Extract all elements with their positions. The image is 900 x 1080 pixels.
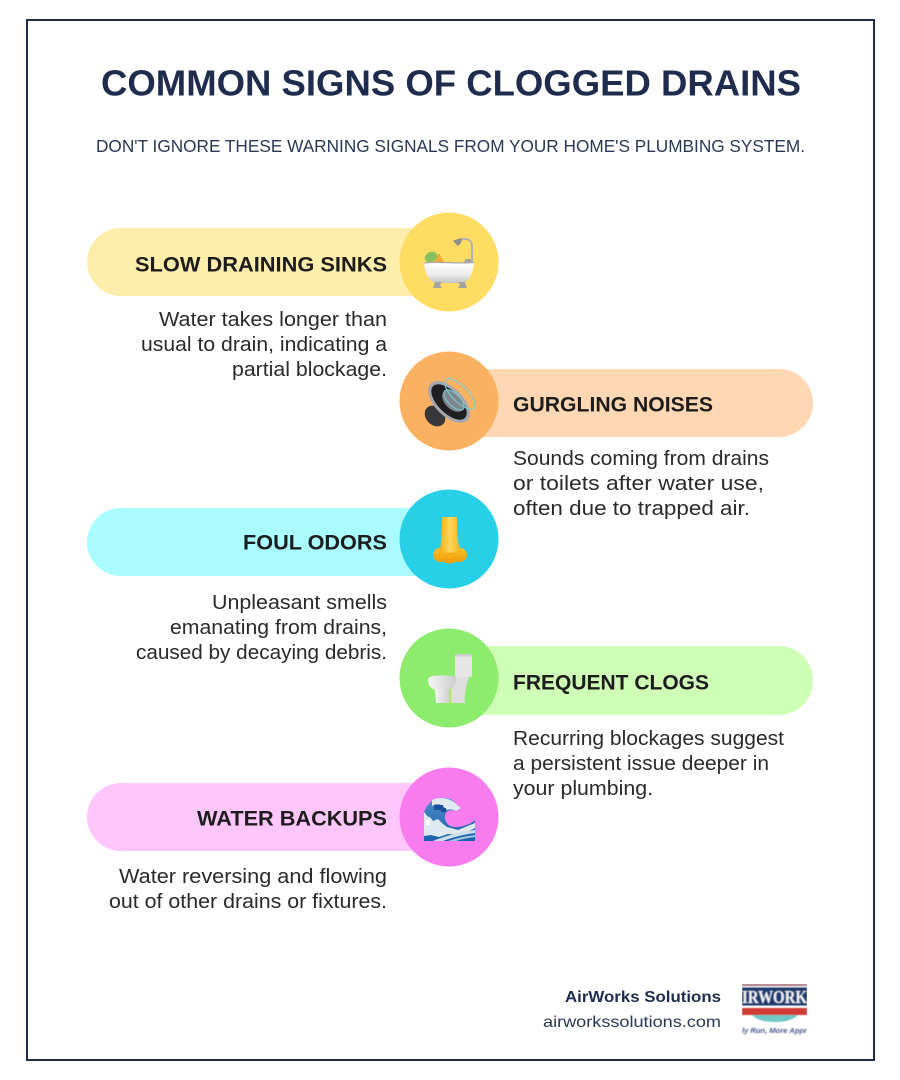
text: water backups description: Water reversing and flowing (119, 866, 387, 888)
logo: ly Run, More Appr (742, 1028, 808, 1035)
text: frequent clogs description (513, 728, 784, 800)
text: frequent clogs description: your plumbing. (513, 778, 653, 800)
heading pill: foul odors (87, 508, 447, 576)
heading pill: water backups (87, 783, 447, 851)
heading pill: gurgling noises: GURGLING NOISES (513, 392, 713, 416)
text: frequent clogs description: Recurring blockages suggest (513, 728, 784, 750)
text: slow draining sinks description: partial blockage. (232, 359, 387, 381)
panel: frequent clogs (400, 628, 813, 800)
icon: wave (400, 768, 498, 866)
text: water backups description (109, 866, 387, 913)
text: slow draining sinks description: Water takes longer than (159, 309, 387, 331)
heading pill: gurgling noises (452, 369, 813, 437)
heading pill: slow draining sinks: SLOW DRAINING SINKS (135, 252, 387, 276)
text: water backups description: out of other drains or fixtures. (109, 891, 387, 913)
heading pill: frequent clogs: FREQUENT CLOGS (513, 670, 709, 694)
icon: toilet (400, 628, 498, 728)
text: foul odors description: caused by decaying debris. (136, 642, 387, 664)
text: foul odors description (136, 592, 387, 664)
heading pill: foul odors: FOUL ODORS (243, 530, 387, 554)
icon: bathtub (400, 212, 498, 312)
text: gurgling noises description (513, 448, 769, 520)
text: frequent clogs description: a persistent issue deeper in (513, 753, 769, 775)
footer: company name and website: airworkssolutions.com (543, 1014, 721, 1031)
heading pill: water backups: WATER BACKUPS (197, 806, 387, 830)
logo (742, 984, 808, 1036)
footer: company name and website: AirWorks Solutions (565, 989, 721, 1006)
text: gurgling noises description: Sounds coming from drains (513, 448, 769, 470)
heading pill: frequent clogs (452, 646, 813, 715)
footer: company name and website (543, 989, 721, 1031)
text: gurgling noises description: often due to trapped air. (513, 498, 750, 520)
text: slow draining sinks description (141, 309, 388, 381)
text: gurgling noises description: or toilets after water use, (513, 473, 764, 495)
panel: gurgling noises (400, 352, 813, 520)
text: slow draining sinks description: usual to drain, indicating a (141, 334, 388, 356)
subtitle: DON'T IGNORE THESE WARNING SIGNALS FROM YOUR HOME'S PLUMBING SYSTEM. (96, 136, 805, 156)
icon: nose (400, 490, 498, 588)
panel: water backups (87, 768, 498, 913)
panel: foul odors (87, 490, 498, 664)
panel: slow draining sinks (87, 212, 498, 381)
heading pill: slow draining sinks (87, 228, 447, 296)
title: COMMON SIGNS OF CLOGGED DRAINS (101, 62, 801, 104)
text: foul odors description: emanating from drains, (170, 617, 387, 639)
text: foul odors description: Unpleasant smells (212, 592, 387, 614)
icon: speaker (400, 352, 498, 450)
